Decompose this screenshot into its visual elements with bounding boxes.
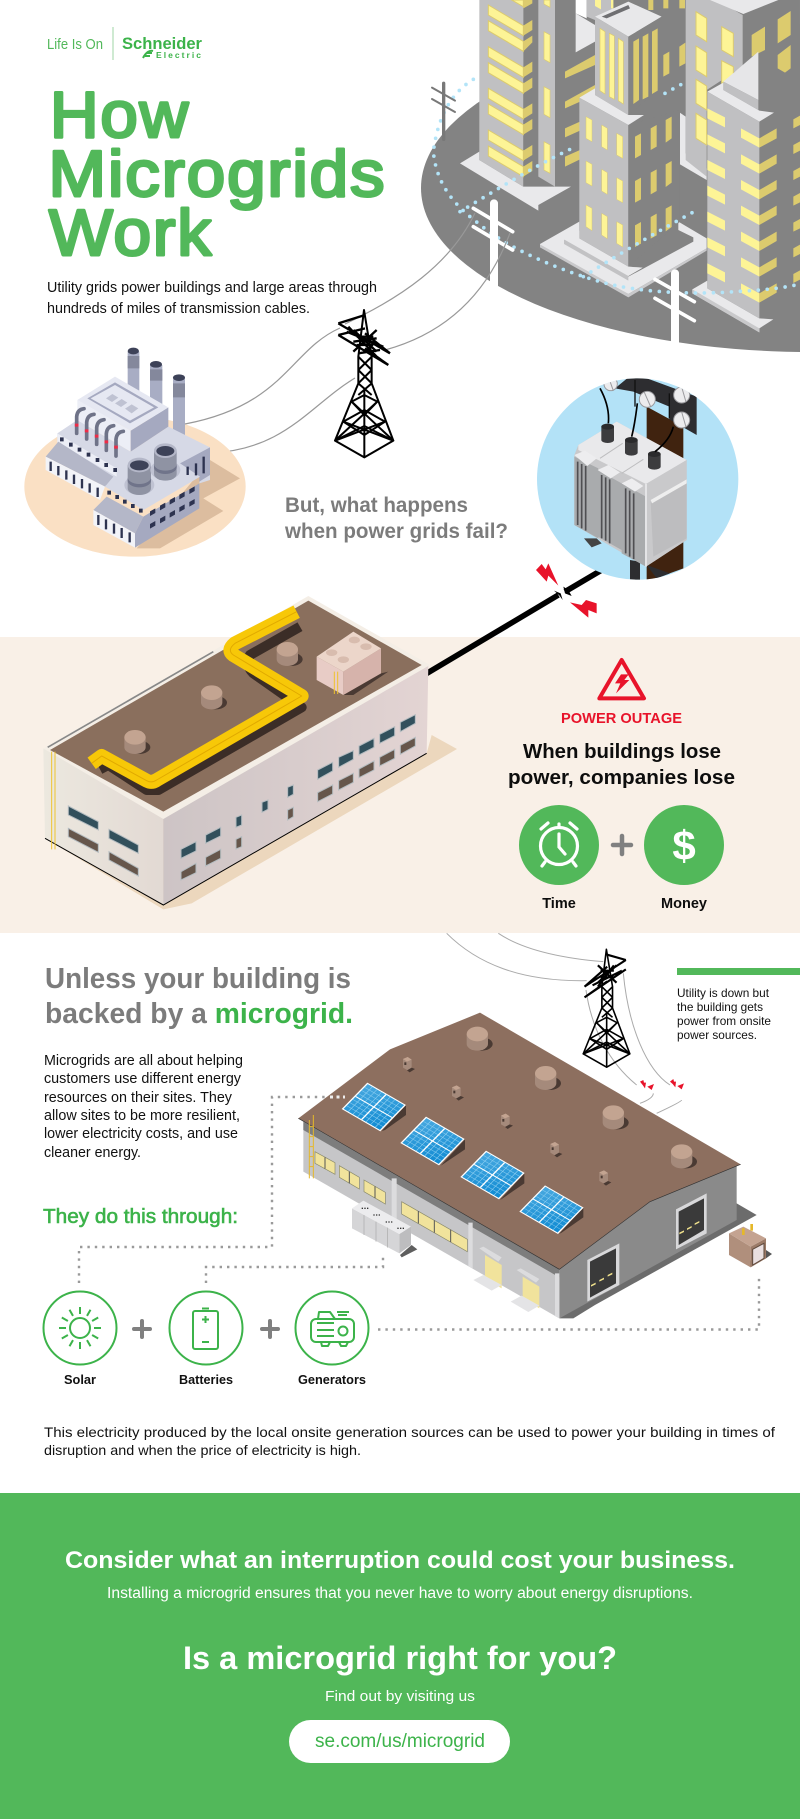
subheading: they do this through: They do this through:: [43, 1206, 238, 1228]
logo: Life Is On, Schneider Electric: Life Is On: [47, 36, 103, 53]
call to action panel: [0, 1493, 800, 1819]
logo: Life Is On, Schneider Electric: Schneider: [122, 35, 203, 53]
microgrid paragraph: [44, 1053, 243, 1161]
callout: utility is down: the building gets: [677, 1000, 763, 1014]
microgrid paragraph: cleaner energy.: [44, 1145, 141, 1161]
intro text: [47, 280, 377, 317]
roof: [298, 1013, 741, 1269]
microgrid paragraph: Microgrids are all about helping: [44, 1053, 243, 1069]
rooftop tanks and vents: [403, 1027, 697, 1186]
statement: when buildings lose power: power, companies lose: [508, 766, 735, 789]
broken cable with sparks: [393, 553, 630, 693]
icon: money: Money: [661, 896, 707, 912]
URL pill: se.com/us/microgrid: [315, 1731, 485, 1752]
utility pole: white left: [473, 203, 513, 295]
entry doors: [485, 1255, 539, 1308]
URL pill: [289, 1720, 510, 1763]
tower: [583, 949, 630, 1067]
city illustration: [421, 0, 800, 352]
icon: warning triangle: [599, 660, 644, 698]
dotted connector: batteries: [206, 1253, 383, 1283]
microgrid paragraph: allow sites to be more resilient,: [44, 1108, 240, 1124]
CTA heading: Consider what an interruption could cost your business.: [65, 1547, 735, 1574]
icon: generators: [296, 1292, 368, 1387]
icon: money: $: [672, 822, 696, 869]
logo: Life Is On, Schneider Electric: Electric: [156, 50, 201, 60]
dotted microgrid boundary: [433, 79, 800, 293]
dotted connector: generators: [378, 1277, 759, 1330]
callout: utility is down: Utility is down but: [677, 986, 770, 1000]
statement: when buildings lose power: [508, 740, 735, 789]
question: what happens when grids fail: when power grids fail?: [284, 520, 508, 543]
statement: when buildings lose power: When buildings lose: [523, 740, 721, 763]
walls: [303, 1123, 559, 1318]
icon: money: [644, 805, 724, 912]
yellow roof pipes: [92, 612, 302, 790]
microgrid paragraph: resources on their sites. They: [44, 1090, 233, 1106]
dotted connector: solar: [79, 1097, 326, 1283]
ladder: [52, 752, 55, 849]
CTA subheading: Installing a microgrid ensures that you never have to worry about energy disruptions.: [107, 1585, 693, 1602]
closing paragraph: [44, 1424, 775, 1458]
rooftop cooling unit: [317, 632, 388, 695]
intro text: hundreds of miles of transmission cables.: [47, 301, 310, 317]
icon: time: [519, 805, 599, 912]
windows: [68, 715, 415, 880]
callout: utility is down: power sources.: [677, 1028, 757, 1042]
icon: batteries: Batteries: [179, 1372, 233, 1387]
windows: [315, 1152, 467, 1252]
microgrid paragraph: lower electricity costs, and use: [44, 1126, 238, 1142]
icon: solar: [44, 1292, 116, 1387]
outage band: [0, 637, 800, 933]
factory illustration: [24, 348, 246, 557]
microgrid heading: Unless your building is: [45, 963, 351, 995]
icon: red sparks: [536, 563, 597, 618]
battery units: [352, 1201, 417, 1257]
utility pole: small gray: [432, 83, 455, 139]
office building without power: [43, 596, 457, 909]
icon: time: Time: [542, 896, 576, 912]
power outage alert: [561, 660, 682, 727]
closing paragraph: This electricity produced by the local onsite generation sources can be used to power your building in times of: [44, 1424, 775, 1440]
microgrid building illustration: [298, 933, 772, 1318]
intro text: Utility grids power buildings and large areas through: [47, 280, 377, 296]
plus sign: [134, 1321, 150, 1337]
icon: solar: Solar: [64, 1372, 96, 1387]
callout: utility is down: power from onsite: [677, 1014, 771, 1028]
loading doors: [587, 1193, 707, 1302]
transmission tower: [335, 310, 393, 457]
factory pipes: [77, 409, 123, 456]
rooftop tanks: [124, 642, 303, 754]
logo: Life Is On, Schneider Electric: [47, 27, 203, 60]
plus sign: [613, 836, 631, 854]
microgrid heading: [45, 963, 353, 1030]
transmission wires: [185, 213, 510, 453]
title: How: [50, 78, 190, 151]
solar panels: [342, 1083, 584, 1234]
microgrid heading: backed by a microgrid.: [45, 998, 353, 1030]
utility lines and sparks: [447, 933, 684, 1113]
label: power outage: POWER OUTAGE: [561, 710, 682, 727]
title: [48, 78, 386, 269]
callout: utility is down: [677, 968, 800, 1042]
ladder: [309, 1115, 313, 1178]
title: Work: [49, 196, 213, 269]
utility pole: white right: [655, 273, 694, 348]
icon: batteries: [170, 1292, 242, 1387]
plus sign: [262, 1321, 278, 1337]
CTA question: Is a microgrid right for you?: [183, 1640, 617, 1676]
icon: generators: Generators: [298, 1372, 366, 1387]
CTA find out: Find out by visiting us: [325, 1688, 475, 1705]
transformer illustration: [537, 373, 738, 582]
ground shadow: [559, 1203, 757, 1318]
title: Microgrids: [48, 137, 386, 210]
question: what happens when grids fail: [284, 494, 508, 543]
site transformer: [729, 1224, 772, 1267]
microgrid paragraph: customers use different energy: [44, 1071, 242, 1087]
question: what happens when grids fail: But, what happens: [285, 494, 468, 517]
closing paragraph: disruption and when the price of electricity is high.: [44, 1442, 361, 1458]
